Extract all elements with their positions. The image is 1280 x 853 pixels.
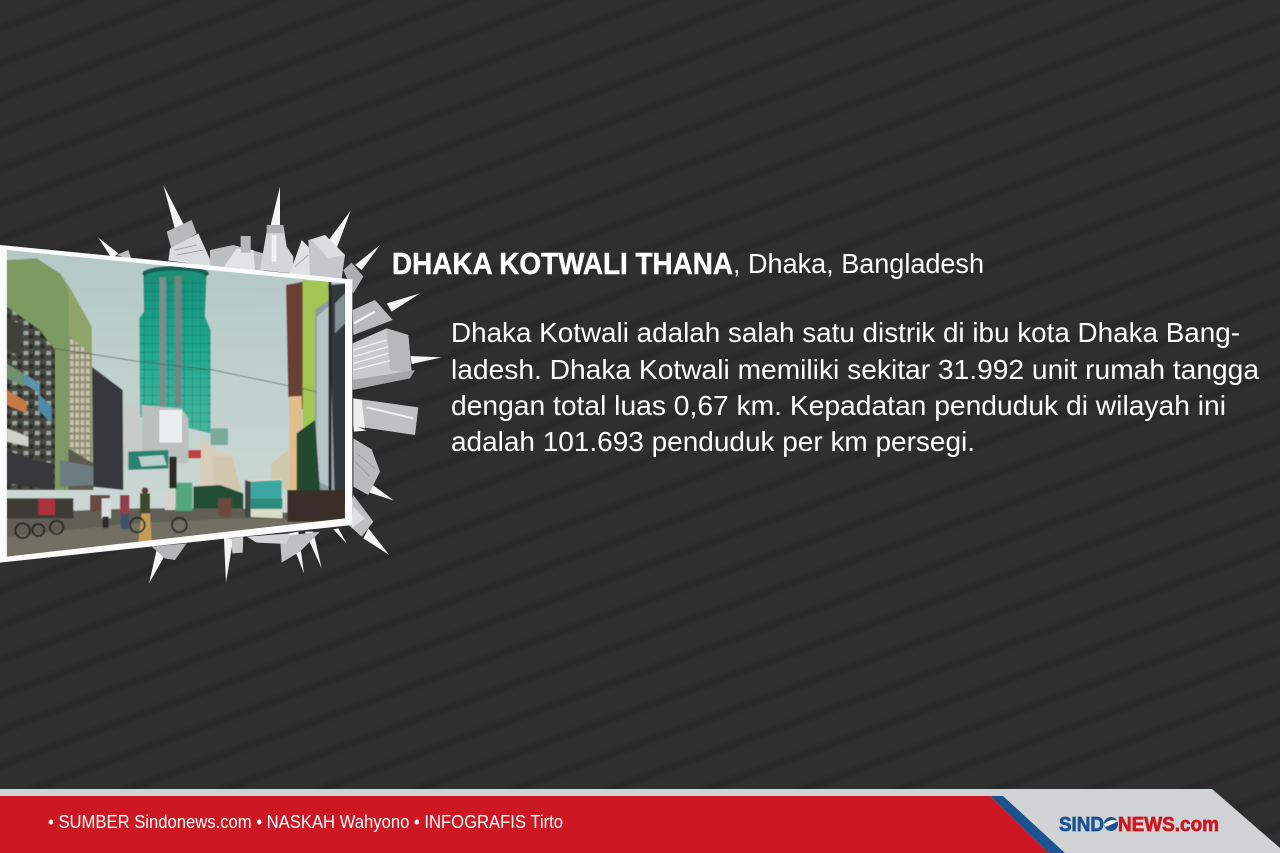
- body text: [451, 317, 1259, 457]
- trees: [193, 485, 243, 512]
- street photo: [0, 243, 353, 563]
- photo frame: [0, 245, 352, 563]
- left buildings: [92, 367, 123, 490]
- source credits: • SUMBER Sindonews.com • NASKAH Wahyono • INFOGRAFIS Tirto: [48, 812, 563, 832]
- right buildings: [286, 282, 303, 410]
- heading: DHAKA KOTWALI THANA: [392, 246, 733, 281]
- logo: SIND: [1059, 814, 1104, 836]
- red band: [0, 796, 1049, 853]
- mid white buildings: [142, 405, 188, 463]
- logo: NEWS.com: [1118, 814, 1219, 836]
- body text: adalah 101.693 penduduk per km persegi.: [451, 426, 975, 457]
- body text: Dhaka Kotwali adalah salah satu distrik di ibu kota Dhaka Bang-: [451, 317, 1240, 348]
- logo: [1059, 814, 1219, 836]
- road: [6, 508, 288, 552]
- heading: , Dhaka, Bangladesh: [733, 248, 984, 279]
- city burst: buildings: [117, 220, 418, 563]
- body text: dengan total luas 0,67 km. Kepadatan penduduk di wilayah ini: [451, 390, 1226, 421]
- footer band: [0, 789, 1280, 853]
- blue stripe: [990, 796, 1065, 853]
- green tower: [139, 265, 211, 433]
- street crowd: [7, 487, 346, 542]
- body text: ladesh. Dhaka Kotwali memiliki sekitar 31.992 unit rumah tangga: [451, 354, 1259, 385]
- city burst: spikes: [98, 185, 442, 583]
- city photo collage: [0, 185, 442, 583]
- distance buildings: [213, 457, 242, 490]
- heading: [392, 246, 984, 281]
- bus: [245, 478, 283, 518]
